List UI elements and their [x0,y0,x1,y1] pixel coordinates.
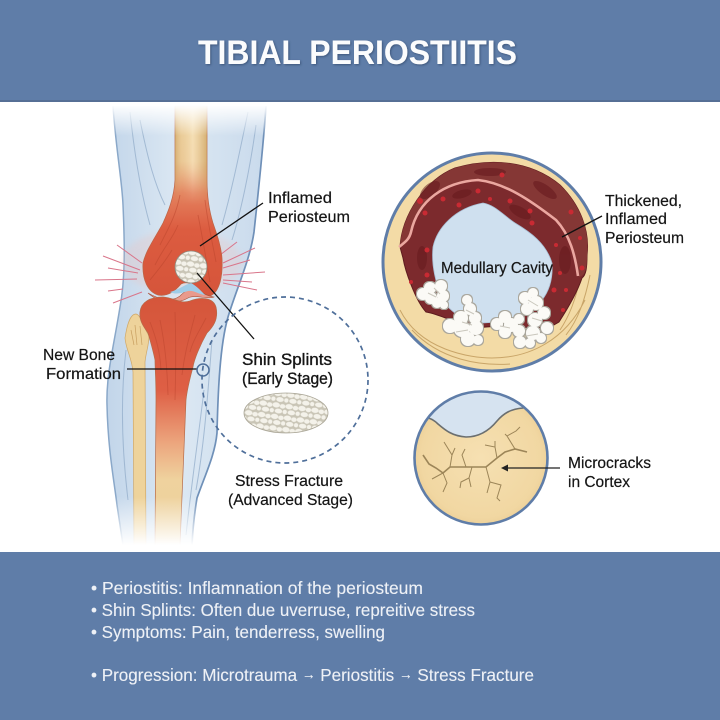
label: thickened inflamed periosteum: Inflamed [605,211,667,228]
arrow: microcracks [501,464,560,472]
periosteal surface [430,392,522,436]
icon: early stage bone patch [244,393,328,433]
leg soft tissue [107,106,266,545]
tibia [140,297,217,545]
panel: bone cross-section [383,153,601,371]
bullet: progression: Stress Fracture [413,665,534,685]
femur [143,106,222,296]
title: TIBIAL PERIOSTIITIS [198,34,517,72]
thickened periosteum [400,162,588,328]
callout: inflamed periosteum leader [200,203,263,246]
label: new bone formation: New Bone [43,347,115,364]
bullet: progression: → [399,666,413,682]
label: microcracks in cortex: Microcracks [568,455,651,472]
inflammation rays [95,242,265,303]
label: inflamed periosteum: Inflamed [268,190,332,207]
label: shin splints early stage: (Early Stage) [242,370,333,388]
outer periosteum band [400,162,588,277]
bullet: shin splints: • Shin Splints: Often due uverruse, repreitive stress [91,600,475,620]
footer panel: key points [0,552,720,720]
label: inflamed periosteum: Periosteum [268,209,350,226]
cortex ring [383,153,601,371]
label: medullary cavity: Medullary Cavity [441,260,553,277]
pink periosteum line [399,180,578,276]
bullet: progression: • Progression: Microtrauma [91,665,302,685]
label: stress fracture advanced stage: (Advanced Stage) [228,492,353,509]
inflammation glow [122,230,242,294]
bullet: progression: Periostitis [315,665,399,685]
top and bottom fade [100,104,280,548]
dashed circle: stage inset [202,297,368,463]
label: stress fracture advanced stage: Stress Fracture [235,473,343,490]
label: new bone formation: Formation [46,366,121,383]
joint space and cartilage [148,283,214,302]
panel: microcracks inset [410,385,550,524]
label: shin splints early stage: Shin Splints [242,351,332,369]
cracks [423,427,527,501]
periosteum dark mottling [417,168,571,274]
bullet: symptoms: • Symptoms: Pain, tenderress, swelling [91,622,385,642]
medullary cavity [433,203,552,323]
label: thickened inflamed periosteum: Periosteum [605,230,684,247]
new bone deposits [417,280,553,348]
knee and leg anatomy illustration [95,104,280,548]
label: thickened inflamed periosteum: Thickened, [605,193,682,210]
lower cortex shading [400,275,590,364]
bullet: progression: → [302,666,315,682]
bone nodule on femur [175,251,207,283]
callout: thickened periosteum leader [562,216,602,237]
header band [0,0,720,102]
red vessels [409,172,584,312]
deposit crease details [428,288,542,336]
bullet: periostitis: • Periostitis: Inflamnation of the periosteum [91,578,423,598]
label: microcracks in cortex: in Cortex [568,474,630,491]
callout: nodule leader [197,273,254,339]
callout: new bone formation marker [127,364,209,376]
fibula [125,314,149,545]
